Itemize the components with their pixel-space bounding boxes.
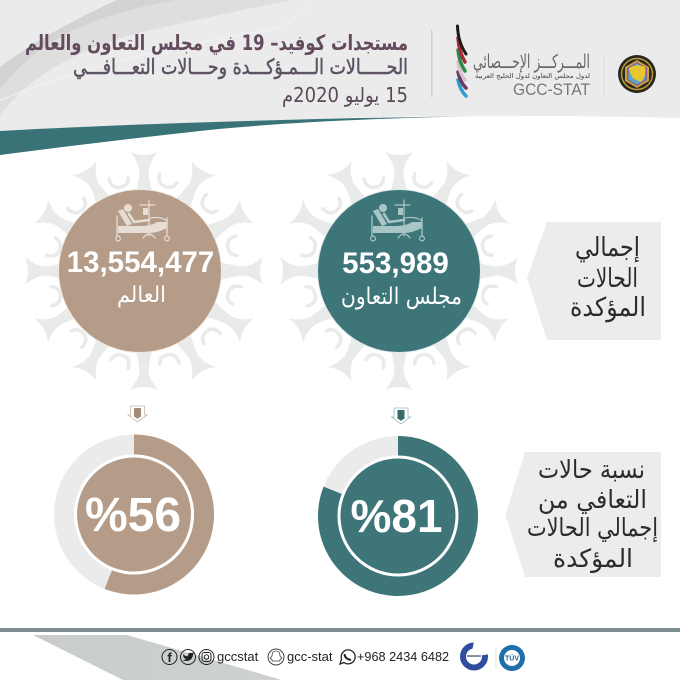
tag: total confirmed cases (527, 222, 661, 340)
title (25, 31, 408, 107)
icon: instagram (199, 650, 214, 664)
panel: GCC total confirmed (280, 152, 518, 390)
tag text: إجمالي (575, 233, 640, 263)
tag text: إجمالي الحالات (527, 513, 658, 543)
icon: TUV badge: TÜV (505, 654, 519, 662)
icon: facebook (162, 650, 177, 665)
logo text: GCC-STAT (473, 51, 590, 99)
handle: gccstat: gccstat (217, 649, 259, 664)
teal header swoosh (0, 116, 480, 155)
GCC percentage: %81 (350, 490, 443, 542)
icon: ISO certification badge (463, 641, 490, 668)
world label: العالم (117, 283, 166, 308)
footer grey wedge (33, 635, 282, 680)
footer contacts (162, 649, 449, 665)
tag text: نسبة حالات (538, 455, 645, 484)
GCC total number: 553,989 (342, 247, 449, 280)
logo divider (604, 56, 605, 96)
center name arabic: المـــركـــز الإحـــصائي (473, 51, 590, 73)
tag text (570, 233, 646, 323)
donut chart: world recovery 56% (64, 434, 214, 595)
divider between title and logo (431, 30, 432, 97)
icon: GCC emblem (618, 55, 656, 93)
phone number: +968 2434 6482 (357, 650, 449, 664)
GCC-STAT wordmark: GCC-STAT (513, 80, 590, 99)
tag: recovery share (506, 452, 661, 577)
GCC label: مجلس التعاون (341, 284, 462, 310)
panel: world total confirmed (25, 152, 263, 390)
icon: GCC-STAT ribbon (458, 26, 466, 96)
tag text: الحالات (577, 264, 638, 294)
circle (317, 189, 481, 353)
virus illustration (25, 152, 263, 390)
arrow: GCC down (392, 408, 410, 424)
circle (58, 189, 222, 353)
handle: gcc-stat: gcc-stat (287, 649, 333, 664)
icon: TUV badge (499, 645, 525, 671)
title line 2: الحـــــالات الـــمـؤكـــدة وحـــالات التعـــافـــي (73, 55, 408, 79)
arrow: world down (128, 406, 147, 422)
icon: patient in bed (371, 200, 424, 241)
tag text: المؤكدة (553, 544, 633, 573)
icon: twitter (180, 650, 196, 664)
tag text: التعافي من (538, 485, 647, 514)
world percentage: %56 (85, 489, 181, 542)
donut chart: GCC recovery 81% (318, 436, 478, 596)
icon: facebook: f (167, 650, 172, 665)
world total number: 13,554,477 (67, 246, 214, 279)
tag text (527, 455, 658, 573)
title line 3: date: 15 يوليو 2020م (282, 83, 408, 107)
virus illustration (280, 152, 518, 390)
tag text: المؤكدة (570, 293, 646, 323)
center subtitle arabic: لدول مجلس التعاون لدول الخليج العربية (475, 72, 590, 80)
footer logo divider (496, 647, 497, 669)
icon: whatsapp (340, 650, 355, 664)
icon: patient in bed (116, 200, 169, 241)
header background (0, 0, 680, 135)
title line 1: مستجدات كوفيد– 19 في مجلس التعاون والعالم (25, 31, 408, 55)
footer rule (0, 628, 680, 632)
icon: snapchat (268, 649, 284, 665)
